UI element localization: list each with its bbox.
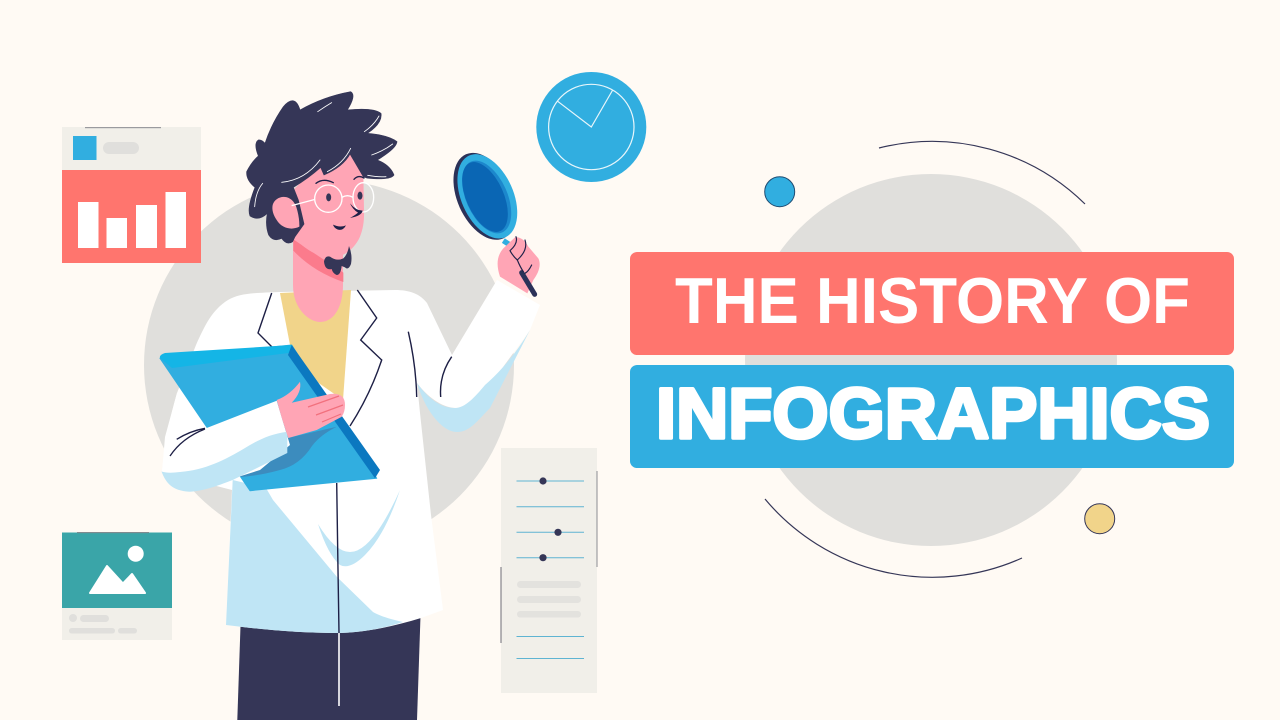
- nose: [350, 203, 363, 218]
- background circle behind title: [745, 174, 1117, 546]
- head and face, drawn in 3x local coordinates: [247, 92, 540, 294]
- background circle behind character: [144, 180, 514, 550]
- neck: [293, 235, 343, 322]
- face: [293, 152, 364, 257]
- glasses: [292, 183, 374, 212]
- raised hand: [498, 237, 540, 294]
- slider panel: [501, 448, 597, 693]
- blue dot: [765, 177, 795, 207]
- hair highlights: [255, 103, 393, 207]
- coat shaded arm: [417, 330, 530, 432]
- hair: [247, 92, 397, 243]
- coat lapels and creases: [258, 290, 452, 426]
- ear: [272, 197, 300, 229]
- bar chart card: [62, 127, 201, 263]
- coat vent: [338, 633, 340, 706]
- top arc around title: [879, 141, 1085, 204]
- hand holding folder: [277, 382, 345, 438]
- yellow dot: [1085, 504, 1115, 534]
- title banner: infographics: INFOGRAPHICS: [656, 375, 1210, 454]
- folded forearm and sleeve: [162, 393, 290, 492]
- neck shadow band: [293, 239, 343, 282]
- eyebrows: [316, 177, 364, 183]
- coat centre seam: [337, 483, 339, 633]
- bottom arc around title: [765, 499, 1022, 577]
- yellow shirt: [280, 290, 351, 400]
- lab coat body and raised arm: [162, 280, 540, 633]
- character: scientist: [160, 92, 540, 720]
- folder: [160, 345, 380, 491]
- beard: [324, 246, 352, 275]
- hand shadow on folder: [240, 427, 337, 477]
- title banner: the history of: THE HISTORY OF: [675, 264, 1190, 337]
- magnifying glass: [441, 143, 529, 249]
- coat swoosh: [318, 490, 400, 566]
- hair over ear: [292, 195, 304, 225]
- title banner: infographics: [630, 365, 1234, 468]
- image card: [62, 532, 172, 640]
- title banner: the history of: [630, 252, 1234, 355]
- eyes: [326, 192, 362, 201]
- trousers: [237, 610, 421, 720]
- mouth: [333, 225, 346, 230]
- clock icon: [536, 72, 646, 182]
- coat shaded panel: [226, 480, 403, 633]
